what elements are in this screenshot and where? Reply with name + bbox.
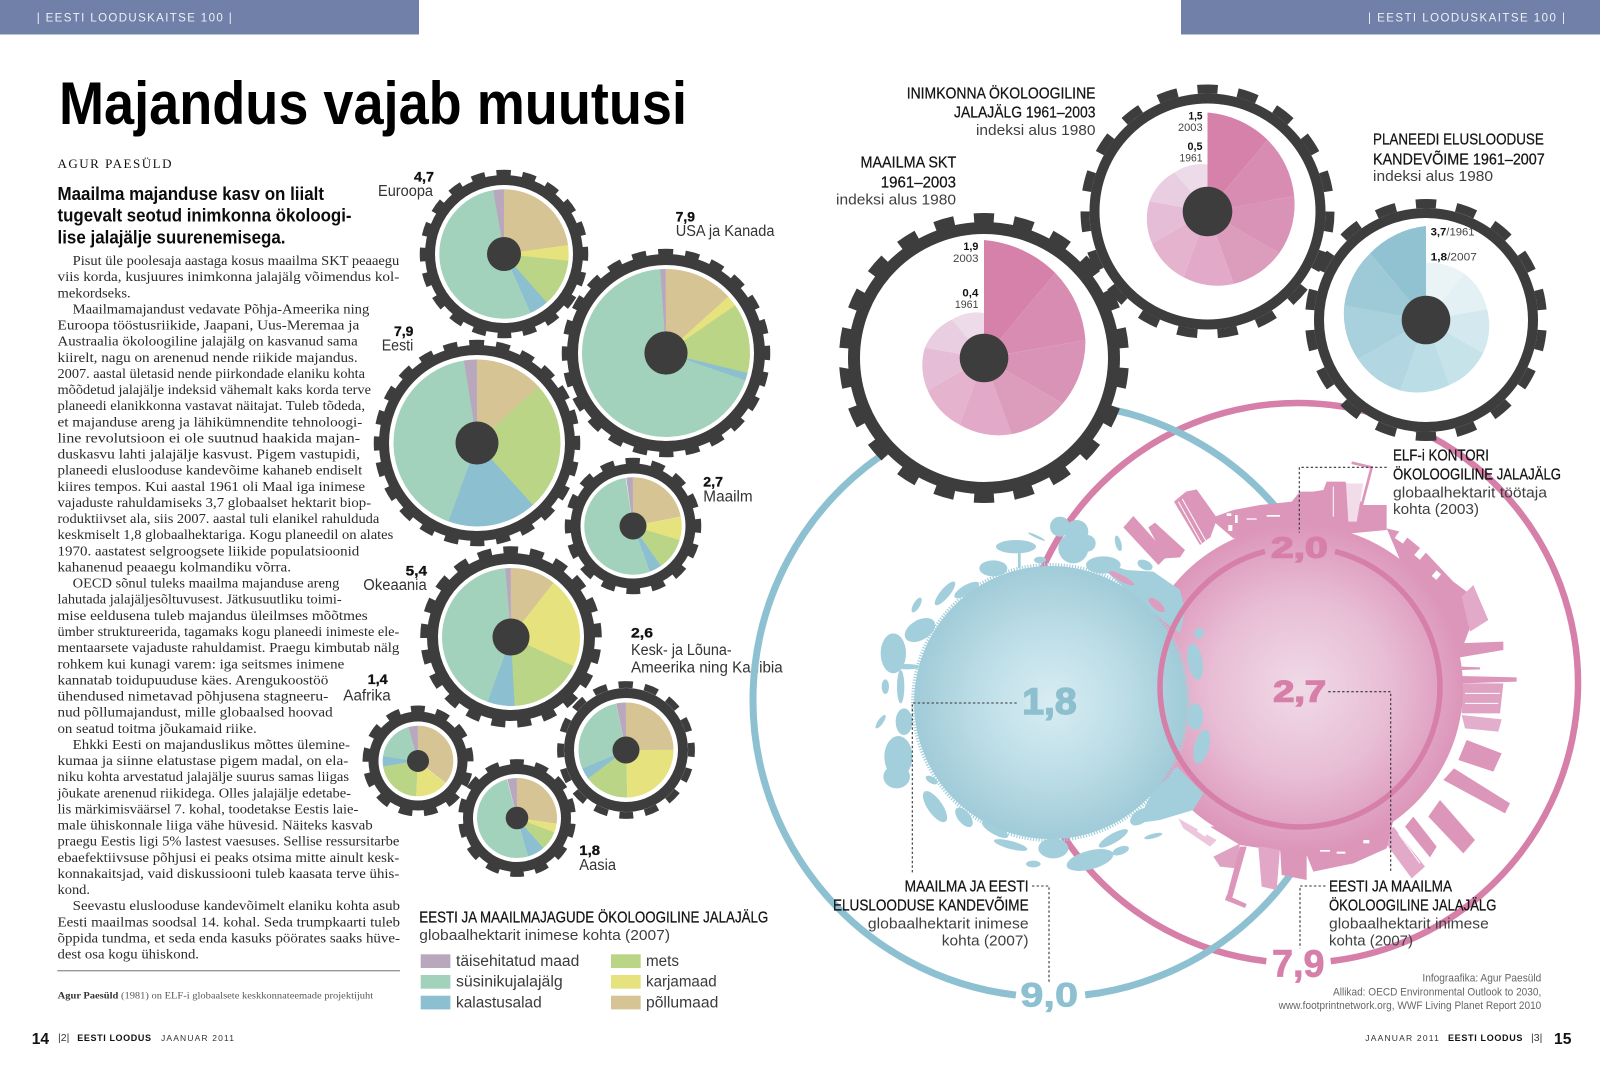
gear: world GDP: 1,9 (963, 241, 978, 253)
label: ELF office: ÖKOLOOGILINE JALAJÄLG (1393, 465, 1561, 483)
article body text: Pisut üle poolesaja aastaga kosus maailma SKT peaaegu (73, 253, 400, 268)
article body text: mõõdetud jalajälje indeksid vähemalt kaks korda terve (58, 382, 371, 397)
gear pie: Eesti: Eesti (382, 338, 413, 355)
gear pie: Maailm: Maailm (703, 489, 753, 506)
lede: tugevalt seotud inimkonna ökoloogi- (58, 206, 352, 226)
value 9,0: 9,0 (1020, 977, 1078, 1015)
footer right: EESTI LOODUS (1448, 1033, 1522, 1043)
heading: planet biocapacity: KANDEVÕIME 1961–2007 (1373, 151, 1545, 168)
label: footprint: globaalhektarit inimese (1329, 915, 1489, 932)
label: ELF office: globaalhektarit töötaja (1393, 484, 1548, 501)
article body text: Austraalia ökoloogiline jalajälg on kasvanud sama (58, 334, 358, 349)
gear pie: Okeaania: Okeaania (363, 577, 427, 594)
header bar left (0, 0, 419, 34)
author: AGUR PAESÜLD (58, 156, 172, 171)
legend: kalastusalad (456, 994, 542, 1011)
spiral chart (908, 240, 1106, 450)
credits: Infograafika: Agur Paesüld (1422, 973, 1541, 985)
city skyline planet (1123, 463, 1517, 908)
gear pie: Euroopa: 4,7 (414, 170, 434, 185)
heading: human footprint: JALAJÄLG 1961–2003 (954, 105, 1096, 122)
gear: planet biocapacity: 3,7/1961 (1431, 227, 1475, 239)
article body text: keskmiselt 1,8 globaalhektariga. Kogu planeedil on alates (58, 527, 393, 542)
gear: planet biocapacity (1300, 194, 1552, 446)
gear pie: Aasia: 1,8 (579, 843, 601, 858)
value 2,7: 2,7 (1273, 676, 1326, 709)
gear: human footprint: 2003 (1178, 122, 1203, 134)
article body text: mekordseks. (58, 285, 131, 300)
inner ring: ELF office footprint (1129, 516, 1471, 858)
heading: planet biocapacity: PLANEEDI ELUSLOODUSE (1373, 132, 1544, 149)
article body text: vajaduste rahuldamiseks 3,7 globaalset hektarit biop- (58, 495, 371, 510)
label: footprint (1329, 879, 1496, 950)
label: ELF office (1393, 448, 1561, 518)
legend: mets (646, 953, 679, 970)
gear: human footprint: 1,5 (1188, 110, 1202, 122)
gear: world GDP: 2003 (953, 253, 978, 265)
value 7,9: 7,9 (1272, 944, 1324, 986)
article body text: lahutada jalajäljesõltuvusest. Jätkusuutliku toimi- (58, 592, 342, 607)
footer left (32, 1031, 234, 1048)
article body text: Euroopa tööstusriikide, Jaapani, Uus-Meremaa ja (58, 318, 359, 332)
gear pie: Aafrika (343, 672, 477, 820)
footer right: JAANUAR 2011 (1365, 1033, 1439, 1043)
label: footprint: ÖKOLOOGILINE JALAJÄLG (1329, 897, 1496, 915)
article body text: on seatud toitma jõukamaid riike. (58, 721, 257, 736)
article body text: niku kohta arvestatud jalajälje suurus samas liigas (58, 769, 349, 784)
lede (58, 184, 352, 247)
gear pie: USA ja Kanada: 7,9 (676, 210, 695, 225)
heading: world GDP: 1961–2003 (881, 174, 956, 191)
lede: lise jalajälje suurenemisega. (58, 227, 286, 247)
heading: world GDP: indeksi alus 1980 (836, 191, 956, 208)
gear pie: Maailm (561, 454, 753, 598)
article body text: kiires tempos. Kui aastal 1961 oli Maal iga inimese (58, 479, 365, 494)
legend: põllumaad (646, 994, 718, 1011)
value 1,8: 1,8 (1022, 681, 1077, 722)
author note: Agur Paesüld (1981) on ELF-i globaalsete keskkonnateemade projektijuht (58, 991, 373, 1002)
gear pie: Aafrika: Aafrika (343, 688, 391, 705)
article body text (56, 253, 400, 962)
article body text: Ehkki Eesti on majanduslikus mõttes ülemine- (73, 737, 350, 752)
header bar left: | EESTI LOODUSKAITSE 100 | (37, 12, 232, 24)
big circle: biocapacity 9,0 (720, 370, 1380, 1030)
article body text: õppida tundma, et seda enda kasuks pöörates saaks hüve- (58, 930, 400, 946)
gear pie: Kesk- ja Lõuna-Ameerika ning Kariibia (554, 626, 783, 822)
article body text: viis korda, kusjuures inimkonna jalajälg võimendus kol- (58, 269, 399, 284)
footer left: EESTI LOODUS (77, 1033, 151, 1043)
article body text: mentaarsete vajaduste rahuldamist. Praegu kimbutab nälg (58, 640, 400, 655)
value 2,0: 2,0 (1271, 532, 1328, 564)
heading: planet biocapacity (1373, 132, 1545, 185)
footer left: JAANUAR 2011 (161, 1033, 234, 1043)
heading: world GDP: MAAILMA SKT (860, 155, 957, 172)
footer left: 14 (32, 1031, 49, 1048)
label: biocapacity: ELUSLOODUSE KANDEVÕIME (833, 898, 1029, 915)
gear pie: Kesk- ja Lõuna-Ameerika ning Kariibia: Kesk- ja Lõuna- (631, 642, 732, 659)
article body text: kumaa ja siinne elatustase pigem madal, on ela- (58, 753, 348, 768)
label: footprint: EESTI JA MAAILMA (1329, 879, 1453, 896)
heading: human footprint: indeksi alus 1980 (976, 122, 1096, 139)
dotted leader lines (912, 467, 1391, 982)
nature silhouettes (874, 517, 1213, 875)
article body text: planeedi elanikkonna vastavat näitajat. Tuleb tõdeda, (58, 398, 365, 413)
article body text: 2007. aastal ületasid nende piirkondade elaniku kohta (58, 366, 365, 381)
gear: human footprint: 1961 (1180, 153, 1202, 165)
gear pie: Eesti (371, 324, 583, 549)
article body text: Seevastu eluslooduse kandevõimelt elaniku kohta asub (73, 898, 400, 913)
article body text: dest osa kogu ühiskond. (58, 947, 199, 962)
skyline buildings (1123, 463, 1517, 908)
legend: karjamaad (646, 974, 717, 991)
gear: planet biocapacity: 1,8/2007 (1431, 252, 1477, 264)
label: biocapacity: kohta (2007) (942, 933, 1029, 950)
article body text: rohkem kui kunagi varem: iga seitsmes inimene (58, 656, 344, 671)
article body text: duskasvu lahti jalajälje kasvust. Pigem vastupidi, (58, 447, 360, 462)
gear: world GDP: 0,4 (962, 288, 979, 300)
label: biocapacity (833, 879, 1029, 950)
article body text: line revolutsioon ei ole suutnud haakida majan- (58, 430, 360, 445)
article body text: kiirelt, nagu on arenenud nende riikide majandus. (58, 350, 358, 365)
legend: täisehitatud maad (456, 953, 579, 970)
legend: globaalhektarit inimese kohta (2007) (419, 927, 670, 944)
article body text: mise eeldusena tuleb majandus üleilmses mõõtmes (58, 608, 368, 623)
article body text: planeedi eluslooduse kandevõime kahaneb endiselt (58, 463, 363, 478)
label: footprint: kohta (2007) (1329, 933, 1413, 950)
planet globe: pink (1137, 525, 1463, 851)
article body text: lis märkimisväärsel 7. kohal, toodetakse Eestis laie- (58, 801, 358, 816)
gear: human footprint (1075, 79, 1340, 344)
article body text: Maailmamajandust vedavate Põhja-Ameerika ning (73, 301, 370, 316)
spiral chart (1133, 112, 1311, 299)
gear pie: Aasia: Aasia (579, 857, 616, 874)
label: biocapacity: MAAILMA JA EESTI (905, 879, 1029, 896)
article body text: kond. (58, 882, 90, 897)
article body text: ümber struktureerida, tagamaks kogu planeedi inimeste ele- (58, 624, 399, 639)
article body text: roduktiivset ala, siis 2007. aastal tuli elanikel rahulduda (58, 511, 379, 526)
gear pie: Aafrika: 1,4 (368, 672, 388, 687)
article body text: male ühiskonnale liiga vähe hüvesid. Näiteks kasvab (58, 818, 373, 833)
article body text: et majanduse areng ja lähikümnendite tehnoloogi- (58, 414, 362, 429)
article body text: kahanenud peaaegu kolmandiku võrra. (58, 560, 291, 574)
heading: planet biocapacity: indeksi alus 1980 (1373, 168, 1493, 185)
header bar right (1181, 0, 1600, 34)
heading: world GDP (836, 155, 957, 208)
legend: süsinikujalajälg (456, 974, 563, 991)
label: ELF office: kohta (2003) (1393, 501, 1479, 518)
gear: human footprint: 0,5 (1188, 141, 1202, 153)
header bar right: | EESTI LOODUSKAITSE 100 | (1368, 12, 1565, 24)
gear pie: Aasia (455, 756, 616, 880)
title: Majandus vajab muutusi (59, 70, 687, 137)
gear pie: Maailm: 2,7 (703, 475, 723, 490)
big circle: ecological footprint 7,9 (988, 373, 1600, 993)
gear pie: USA ja Kanada (559, 210, 775, 460)
footer right: |3| (1531, 1032, 1542, 1044)
heading: human footprint: INIMKONNA ÖKOLOOGILINE (907, 84, 1096, 102)
gear pie: Okeaania: 5,4 (406, 564, 428, 579)
footer left: |2| (58, 1032, 69, 1044)
legend (419, 909, 768, 1011)
gear: world GDP: 1961 (955, 299, 978, 311)
footer right: 15 (1554, 1031, 1571, 1048)
footer right (1365, 1031, 1571, 1048)
article body text: jõukate arenenud riikidega. Olles jalajälje edetabe- (56, 785, 351, 800)
legend: EESTI JA MAAILMAJAGUDE ÖKOLOOGILINE JALAJÄLG (419, 909, 768, 927)
gear: world GDP (834, 208, 1134, 508)
credits: Allikad: OECD Environmental Outlook to 2030, (1333, 987, 1541, 999)
gear pie: Euroopa: Euroopa (378, 183, 433, 200)
gear pie: Kesk- ja Lõuna-Ameerika ning Kariibia: Ameerika ning Kariibia (631, 659, 783, 676)
article body text: nud põllumajandust, mille globaalsed hoovad (58, 705, 333, 720)
gear pie: USA ja Kanada: USA ja Kanada (676, 223, 775, 240)
article body text: kannatab toidupuuduse käes. Arengukoostöö (58, 672, 329, 687)
article body text: OECD sõnul tuleks maailma majanduse areng (73, 576, 340, 591)
gear pie: Eesti: 7,9 (394, 324, 413, 339)
credits (1278, 973, 1541, 1012)
article body text: 1970. aastatest selgroogsete liikide populatsioonid (58, 543, 360, 558)
planet globe: blue (913, 565, 1188, 840)
article body text: konnakaitsjad, vaid diskussiooni tuleb kaasata terve ühis- (58, 866, 399, 881)
article body text: ühendused nimetavad põhjusena stagneeru- (58, 688, 328, 704)
heading: human footprint (907, 84, 1096, 139)
gear pie: Okeaania (363, 543, 605, 731)
spiral chart (1331, 214, 1495, 402)
label: biocapacity: globaalhektarit inimese (868, 915, 1029, 932)
gear pie: Kesk- ja Lõuna-Ameerika ning Kariibia: 2,6 (631, 626, 654, 641)
lede: Maailma majanduse kasv on liialt (58, 184, 324, 204)
article body text: Eesti maailmas soodsal 14. kohal. Seda trumpkaarti tuleb (58, 914, 400, 929)
label: ELF office: ELF-i KONTORI (1393, 448, 1489, 465)
article body text: praegu Eestis ligi 5% lastest vaesuses. Sellise ressursitarbe (58, 834, 399, 849)
gear pie: Euroopa (378, 167, 591, 341)
credits: www.footprintnetwork.org, WWF Living Planet Report 2010 (1278, 1000, 1541, 1012)
article body text: ebaefektiivsuse põhjusi ei peaks otsima mitte ainult kesk- (58, 850, 399, 865)
